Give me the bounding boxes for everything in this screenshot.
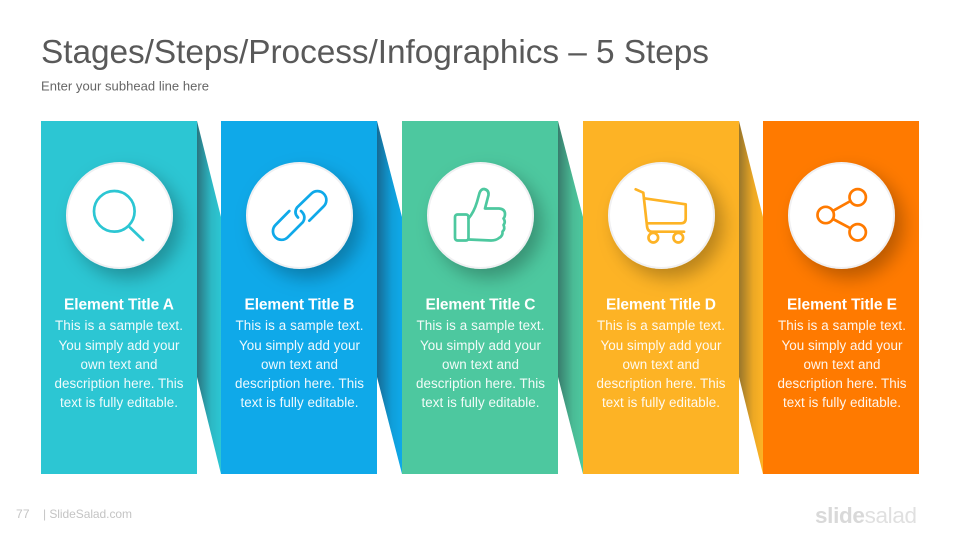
icon: shopping cart <box>636 189 686 242</box>
fold shadow B <box>377 121 402 474</box>
heading B: Element Title B <box>244 296 354 314</box>
card E <box>763 121 919 474</box>
fold shadow C <box>558 121 583 474</box>
logo wordmark: slidesalad <box>815 503 917 528</box>
fold shadow A <box>197 121 221 474</box>
icon: thumbs up <box>455 189 505 240</box>
body text A: description here. This <box>54 376 184 391</box>
body text C: description here. This <box>416 376 545 391</box>
card D <box>583 121 739 474</box>
body text D: text is fully editable. <box>602 395 720 410</box>
icon: share <box>818 189 866 240</box>
heading E: Element Title E <box>787 296 897 314</box>
body text A: This is a sample text. <box>55 318 183 333</box>
body text D: This is a sample text. <box>597 318 725 333</box>
body text E: This is a sample text. <box>778 318 906 333</box>
body text C <box>416 318 545 410</box>
body text B <box>235 318 364 410</box>
heading D: Element Title D <box>606 296 716 314</box>
body text A: own text and <box>80 357 158 372</box>
page number: 77 <box>16 507 30 521</box>
title: Stages/Steps/Process/Infographics – 5 Steps <box>41 34 709 71</box>
body text B: description here. This <box>235 376 364 391</box>
body text D <box>596 318 726 410</box>
panel: Element C <box>402 121 583 474</box>
card A <box>41 121 197 474</box>
body text C: You simply add your <box>420 338 542 353</box>
body text D: You simply add your <box>600 338 722 353</box>
card C <box>402 121 558 474</box>
body text C: This is a sample text. <box>416 318 544 333</box>
body text B: own text and <box>261 357 338 372</box>
body text E: own text and <box>804 357 880 372</box>
footer site name: | SlideSalad.com <box>43 507 132 521</box>
icon: chain link <box>273 191 326 240</box>
icon circle C <box>428 163 533 268</box>
subhead: Enter your subhead line here <box>41 78 209 94</box>
body text E: text is fully editable. <box>783 395 901 410</box>
icon: magnifier <box>94 191 143 240</box>
fold shadow D <box>739 121 763 474</box>
body text D: description here. This <box>596 376 726 391</box>
body text B: You simply add your <box>239 338 361 353</box>
panel: Element A <box>41 121 221 474</box>
body text C: text is fully editable. <box>422 395 540 410</box>
body text B: This is a sample text. <box>236 318 364 333</box>
card B <box>221 121 377 474</box>
body text D: own text and <box>622 357 700 372</box>
icon circle A <box>67 163 172 268</box>
panel: Element D <box>583 121 763 474</box>
body text E <box>778 318 907 410</box>
heading C: Element Title C <box>426 296 536 314</box>
icon circle E <box>789 163 894 268</box>
body text B: text is fully editable. <box>240 395 358 410</box>
icon circle D <box>609 163 714 268</box>
body text C: own text and <box>442 357 519 372</box>
body text A: You simply add your <box>58 338 180 353</box>
body text A <box>54 318 184 410</box>
panel: Element B <box>221 121 402 474</box>
heading A: Element Title A <box>64 296 174 314</box>
panel: Element E <box>763 121 919 474</box>
body text E: You simply add your <box>782 338 903 353</box>
body text E: description here. This <box>778 376 907 391</box>
icon circle B <box>247 163 352 268</box>
body text A: text is fully editable. <box>60 395 178 410</box>
